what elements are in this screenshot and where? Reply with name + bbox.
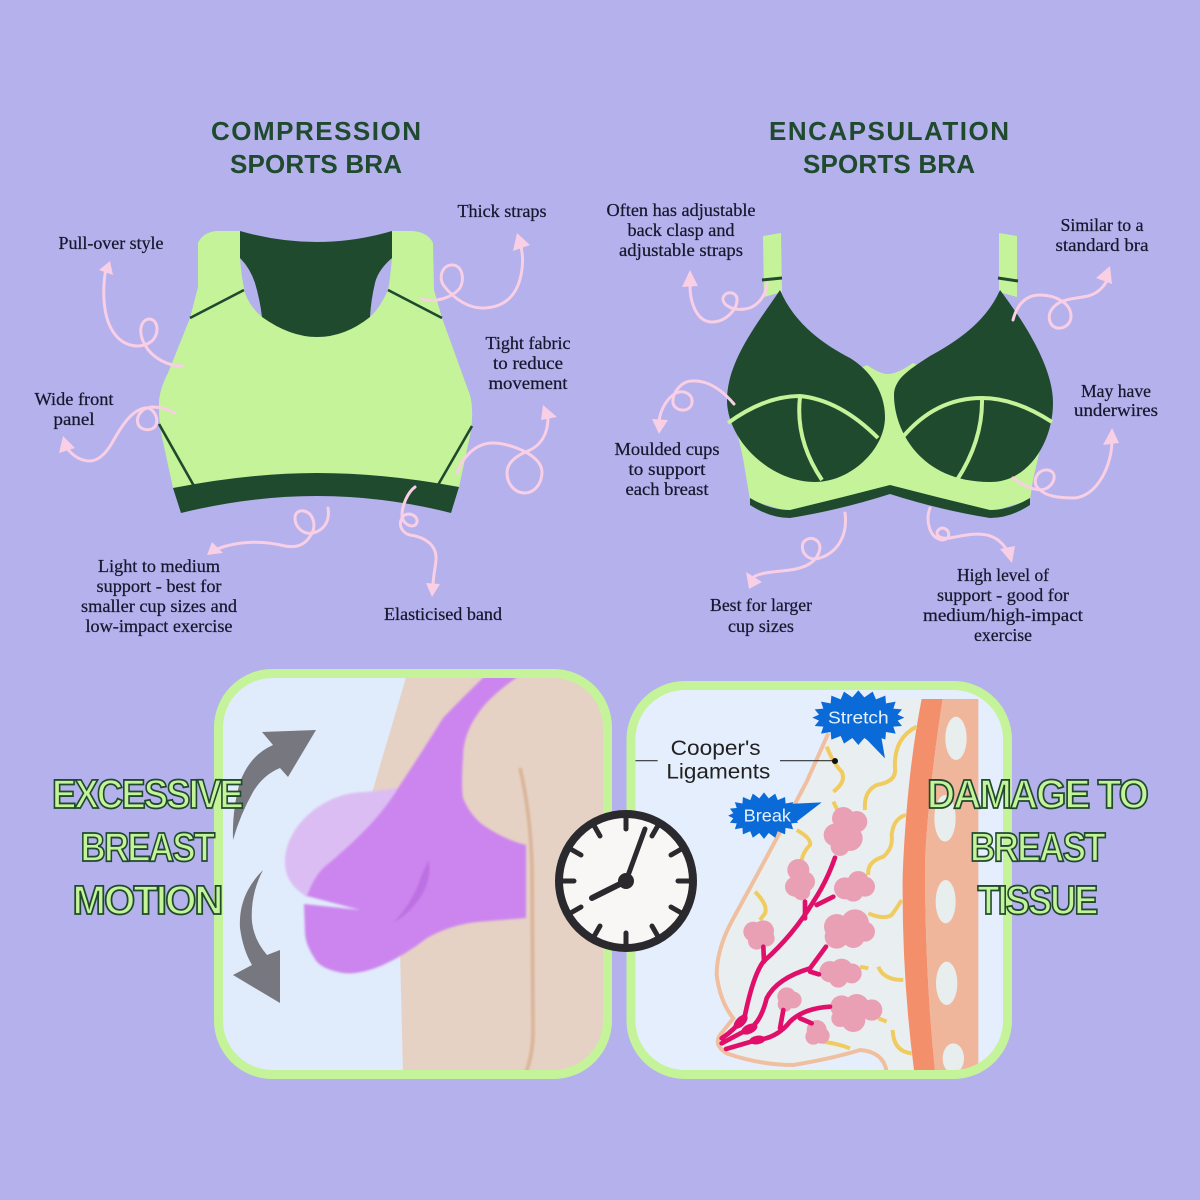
icon: clock	[559, 814, 693, 948]
title: damage to breast tissue	[927, 771, 1148, 923]
label: Cooper's Ligaments: Ligaments	[666, 759, 770, 783]
labels: encapsulation sports bra: May have	[1081, 381, 1151, 401]
arrows: encapsulation callouts	[652, 266, 1119, 589]
labels: encapsulation sports bra: High level of	[957, 565, 1049, 585]
labels: encapsulation sports bra: Often has adjustable	[606, 200, 756, 220]
labels: compression sports bra: Elasticised band	[384, 604, 502, 624]
heading: compression sports bra: SPORTS BRA	[230, 149, 402, 179]
callout: break: Break	[744, 806, 791, 826]
labels: encapsulation sports bra: underwires	[1074, 400, 1158, 420]
labels: compression sports bra: to reduce	[493, 353, 563, 373]
labels: encapsulation sports bra: medium/high-impact	[923, 605, 1083, 625]
callout: stretch: Stretch	[828, 708, 889, 728]
heading: encapsulation sports bra: SPORTS BRA	[803, 149, 975, 179]
heading: encapsulation sports bra: ENCAPSULATION	[769, 116, 1009, 146]
icon: gray up and down motion arrows	[233, 730, 316, 1003]
labels: compression sports bra: Wide front	[34, 389, 114, 409]
heading: encapsulation sports bra	[769, 116, 1009, 179]
labels: encapsulation sports bra: Moulded cups	[614, 439, 720, 459]
labels: encapsulation sports bra: exercise	[974, 625, 1032, 645]
labels: compression sports bra: smaller cup sizes and	[81, 596, 237, 616]
illustration: compression sports bra	[159, 231, 472, 513]
labels: encapsulation sports bra: adjustable straps	[619, 240, 743, 260]
arrows: compression callouts	[59, 233, 557, 597]
labels: compression sports bra: low-impact exercise	[86, 616, 233, 636]
labels: compression sports bra: Light to medium	[98, 556, 220, 576]
labels: compression sports bra: Pull-over style	[58, 233, 164, 253]
labels: compression sports bra: movement	[488, 373, 568, 393]
callout: break	[728, 792, 822, 839]
heading: compression sports bra	[211, 116, 421, 179]
labels: encapsulation sports bra: cup sizes	[728, 616, 794, 636]
labels: compression sports bra: panel	[54, 409, 94, 429]
labels: encapsulation sports bra: to support	[628, 459, 706, 479]
label: Cooper's Ligaments	[636, 740, 838, 783]
labels: encapsulation sports bra: each breast	[626, 479, 708, 499]
labels: compression sports bra	[34, 201, 570, 636]
title: excessive breast motion: EXCESSIVE	[52, 771, 243, 817]
label: Cooper's Ligaments: Cooper's	[671, 736, 761, 760]
callout: stretch	[812, 690, 904, 758]
title: excessive breast motion: BREAST	[80, 824, 215, 870]
labels: compression sports bra: support - best for	[96, 576, 222, 596]
title: excessive breast motion: MOTION	[72, 877, 222, 923]
panel: excessive breast motion illustration	[219, 674, 612, 1075]
labels: encapsulation sports bra: Similar to a	[1060, 215, 1144, 235]
labels: encapsulation sports bra	[606, 200, 1158, 645]
heading: compression sports bra: COMPRESSION	[211, 116, 421, 146]
panel border: left panel	[218, 674, 608, 1074]
labels: compression sports bra: Thick straps	[458, 201, 546, 221]
title: excessive breast motion	[52, 771, 243, 923]
labels: encapsulation sports bra: standard bra	[1056, 235, 1149, 255]
labels: encapsulation sports bra: support - good for	[937, 585, 1069, 605]
labels: encapsulation sports bra: back clasp and	[628, 220, 734, 240]
labels: encapsulation sports bra: Best for larger	[710, 595, 812, 615]
title: damage to breast tissue: TISSUE	[978, 877, 1097, 923]
panel: damage to breast tissue anatomy illustration	[627, 681, 1012, 1079]
labels: compression sports bra: Tight fabric	[486, 333, 570, 353]
title: damage to breast tissue: DAMAGE TO	[927, 771, 1148, 817]
illustration: encapsulation sports bra	[727, 233, 1053, 518]
title: damage to breast tissue: BREAST	[970, 824, 1106, 870]
